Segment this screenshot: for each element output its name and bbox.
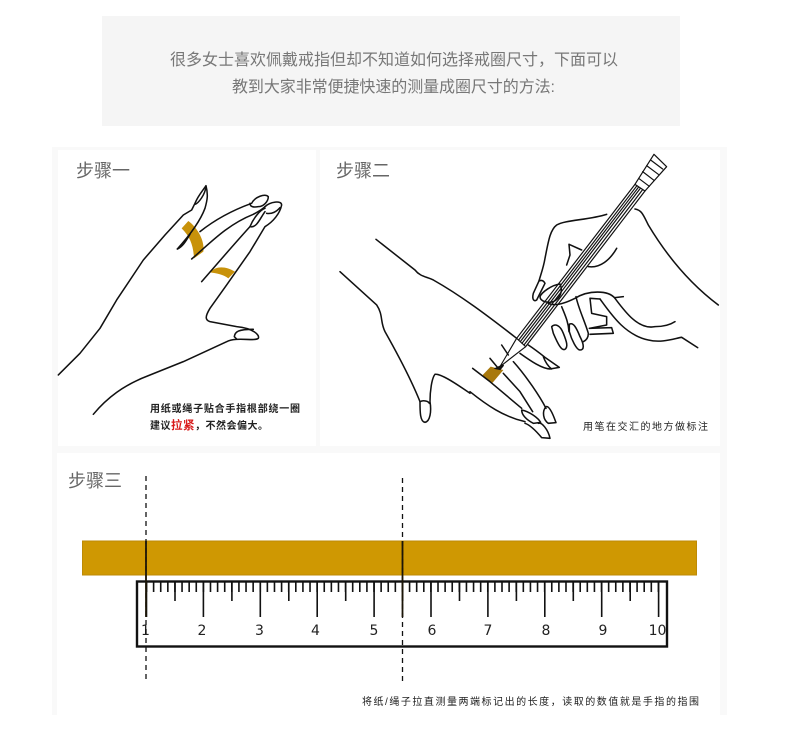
panel: step two xyxy=(320,150,720,446)
ruler numbers: 3 xyxy=(255,623,264,639)
ruler numbers: 5 xyxy=(370,623,378,639)
ruler numbers: 9 xyxy=(599,623,607,639)
step one caption: 建议拉紧，不然会偏大。 xyxy=(150,418,268,432)
ruler xyxy=(137,582,667,646)
pen xyxy=(497,154,667,369)
step one caption xyxy=(150,402,300,432)
illustration: hand with paper strip xyxy=(58,186,282,414)
step two heading: 步骤二 xyxy=(336,161,390,181)
intro panel xyxy=(102,16,680,126)
step three heading: 步骤三 xyxy=(68,471,122,491)
ruler numbers xyxy=(141,623,666,639)
step one heading: 步骤一 xyxy=(76,161,130,181)
ruler numbers: 7 xyxy=(484,623,492,639)
ruler numbers: 2 xyxy=(198,623,206,639)
paper strip xyxy=(82,541,696,575)
panel: step one xyxy=(58,150,316,446)
illustration: marking the strip with a pen xyxy=(340,154,718,438)
ruler numbers: 8 xyxy=(542,623,550,639)
step one caption: 用纸或绳子贴合手指根部绕一圈 xyxy=(150,402,300,415)
ruler numbers: 6 xyxy=(428,623,437,639)
ruler numbers: 10 xyxy=(649,623,666,639)
intro panel: 很多女士喜欢佩戴戒指但却不知道如何选择戒圈尺寸，下面可以 xyxy=(170,50,618,69)
step two caption: 用笔在交汇的地方做标注 xyxy=(583,420,708,433)
intro panel: 教到大家非常便捷快速的测量成圈尺寸的方法: xyxy=(232,78,555,96)
drawing hand xyxy=(533,209,718,350)
fingers and strip xyxy=(470,345,559,438)
ruler numbers: 4 xyxy=(311,623,320,639)
dashed measure line: start mark xyxy=(145,476,147,682)
ruler numbers: 1 xyxy=(141,623,150,639)
wrist and arm of measured hand xyxy=(340,239,517,422)
steps backdrop xyxy=(52,147,727,715)
panel: step three xyxy=(57,453,720,715)
dashed measure line: end mark xyxy=(402,478,404,682)
step three caption: 将纸/绳子拉直测量两端标记出的长度，读取的数值就是手指的指围 xyxy=(362,695,699,708)
